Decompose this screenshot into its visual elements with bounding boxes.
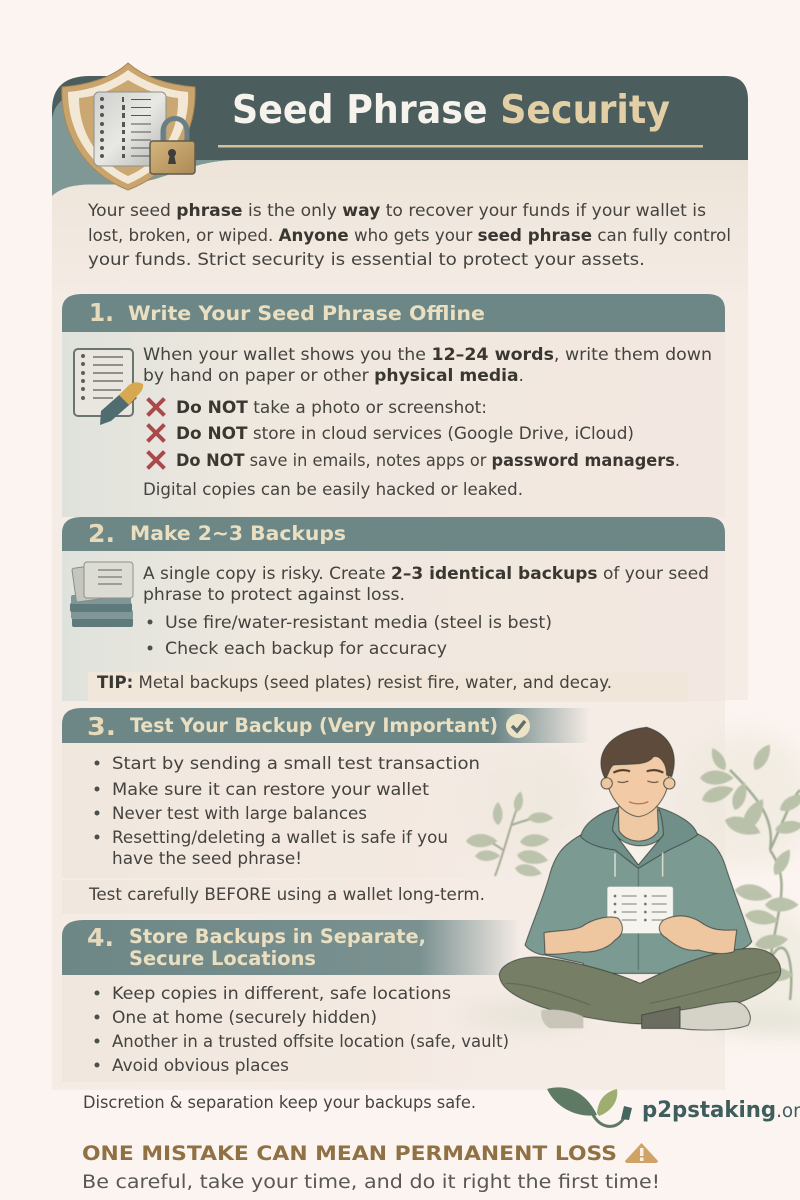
- warning heading: ONE MISTAKE CAN MEAN PERMANENT LOSS: [82, 1142, 617, 1165]
- section 4 header: Store Backups in Separate,: [129, 925, 426, 948]
- panel: section 3: [62, 708, 590, 914]
- icon: warning triangle: [625, 1143, 658, 1163]
- bullet list: Check each backup for accuracy: [165, 639, 447, 658]
- section 1 header: Write Your Seed Phrase Offline: [128, 302, 485, 325]
- do not 1: Do NOT take a photo or screenshot:: [176, 398, 487, 417]
- face details: [613, 770, 663, 804]
- body text: [143, 345, 712, 385]
- hood: [581, 807, 697, 868]
- icon: check badge: [506, 714, 530, 738]
- icon: red cross 1: [149, 400, 163, 414]
- body text: [143, 564, 709, 604]
- tip: [88, 672, 688, 702]
- intro text: Your seed phrase is the only way to recover your funds if your wallet is: [87, 201, 706, 220]
- bullet list: Never test with large balances: [112, 804, 367, 823]
- body text: by hand on paper or other physical media .: [143, 366, 524, 385]
- title: Seed Phrase Security: [232, 88, 670, 133]
- intro text: lost, broken, or wiped. Anyone who gets your seed phrase can fully control: [88, 226, 731, 245]
- section 1 header: 1.: [89, 298, 114, 327]
- bullet list: One at home (securely hidden): [112, 1008, 377, 1027]
- do not 3: Do NOT save in emails, notes apps or password managers.: [176, 451, 680, 470]
- head: [607, 745, 669, 817]
- hoodie strings and zipper: [615, 853, 663, 877]
- section 4 header: [62, 920, 520, 975]
- bullet list: Use fire/water-resistant media (steel is best): [165, 613, 552, 632]
- intro text: [87, 201, 731, 269]
- icon: stack of backups: [70, 562, 133, 627]
- bullet list: have the seed phrase!: [112, 849, 302, 868]
- tip: TIP: Metal backups (seed plates) resist fire, water, and decay.: [97, 673, 612, 692]
- panel: main card: [52, 76, 748, 1090]
- section 3 header: 3.: [87, 712, 116, 741]
- panel: section 4: [62, 920, 532, 1112]
- neck and t-shirt: [613, 831, 663, 865]
- icon: checklist with pen: [74, 349, 143, 425]
- icon: red cross 2: [149, 426, 163, 440]
- bullet list: Avoid obvious places: [112, 1056, 289, 1075]
- hoodie sleeves and torso: [525, 810, 752, 973]
- misty background behind person: [430, 730, 800, 1032]
- section 2 header: [62, 517, 725, 551]
- icon: shield with seed list and padlock: [62, 63, 195, 190]
- seed card: [607, 887, 673, 933]
- body text: When your wallet shows you the 12–24 words , write them down: [143, 345, 712, 364]
- section 3 header: Test Your Backup (Very Important): [130, 714, 498, 737]
- section 2 header: Make 2~3 Backups: [130, 522, 346, 545]
- section 4 header: 4.: [87, 923, 114, 952]
- bullet list: [94, 984, 509, 1075]
- panel: section 2: [62, 517, 725, 702]
- section 4 header: Secure Locations: [129, 947, 316, 970]
- plant right: [699, 741, 800, 1000]
- note: Test carefully BEFORE using a wallet long-term.: [88, 885, 485, 904]
- plant left: [466, 791, 553, 879]
- closing line: Be careful, take your time, and do it right the first time!: [82, 1172, 660, 1193]
- illustration: person holding seed card: [499, 727, 781, 1030]
- body text: A single copy is risky. Create 2–3 identical backups of your seed: [143, 564, 709, 583]
- legs: [499, 948, 781, 1024]
- section 2 header: 2.: [88, 519, 115, 548]
- note: Digital copies can be easily hacked or leaked.: [143, 480, 523, 499]
- bullet list: [94, 754, 480, 868]
- icon: red cross 3: [149, 453, 163, 467]
- bullet list: Resetting/deleting a wallet is safe if you: [112, 828, 448, 847]
- bullet list: Another in a trusted offsite location (safe, vault): [112, 1032, 509, 1051]
- hair: [601, 727, 674, 778]
- do not 2: Do NOT store in cloud services (Google Drive, iCloud): [176, 424, 634, 443]
- section 3 header: [62, 708, 590, 743]
- bullet list: Make sure it can restore your wallet: [112, 780, 430, 799]
- bullet list: Keep copies in different, safe locations: [112, 984, 451, 1003]
- panel: section 1: [62, 294, 725, 517]
- icon: leaf and plug: [547, 1087, 800, 1126]
- shoe: [680, 1002, 750, 1030]
- bullet list: [148, 613, 552, 658]
- illustration: plants: [466, 741, 800, 1000]
- note: Discretion & separation keep your backups safe.: [83, 1093, 476, 1112]
- footer logo: p2pstaking.org: [547, 1087, 800, 1126]
- intro text: your funds. Strict security is essential to protect your assets.: [88, 250, 645, 269]
- section 1 header: [62, 294, 725, 332]
- bullet list: Start by sending a small test transaction: [112, 754, 480, 773]
- body text: phrase to protect against loss.: [143, 585, 405, 604]
- forearms and hands: [544, 917, 622, 954]
